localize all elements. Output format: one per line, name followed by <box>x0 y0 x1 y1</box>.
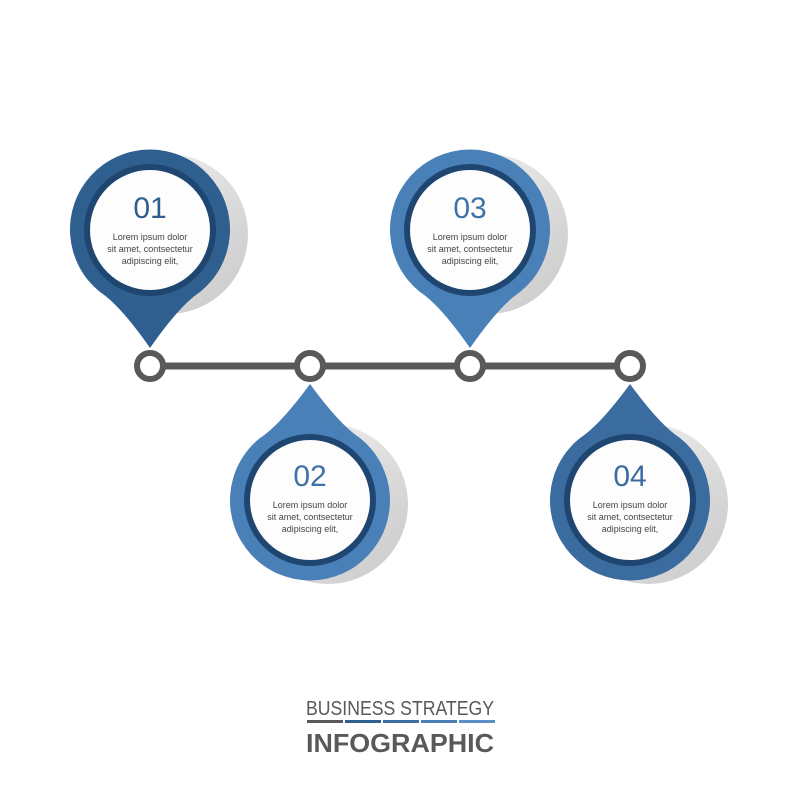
pin 03 <box>390 150 568 348</box>
pin 02: 02 <box>293 460 327 493</box>
pin 01: Lorem ipsum dolor <box>113 232 187 242</box>
pin 04: 04 <box>613 460 647 493</box>
pin 04: Lorem ipsum dolor <box>593 500 667 510</box>
pin 03: adipiscing elit, <box>442 256 498 266</box>
pin 02 <box>230 384 408 584</box>
timeline line <box>137 353 643 379</box>
pin 02: sit amet, contsectetur <box>267 512 353 522</box>
pin 01: 01 <box>133 192 167 225</box>
title block <box>306 698 495 758</box>
pin 02: adipiscing elit, <box>282 524 338 534</box>
pin 01: sit amet, contsectetur <box>107 244 193 254</box>
pin 04 <box>550 384 728 584</box>
title block: INFOGRAPHIC <box>306 728 494 758</box>
pin 04: adipiscing elit, <box>602 524 658 534</box>
pin 03: sit amet, contsectetur <box>427 244 513 254</box>
pin 04: sit amet, contsectetur <box>587 512 673 522</box>
pin 03: 03 <box>453 192 487 225</box>
pin 01: adipiscing elit, <box>122 256 178 266</box>
title block: BUSINESS STRATEGY <box>306 698 494 720</box>
pin 02: Lorem ipsum dolor <box>273 500 347 510</box>
pin 01 <box>70 150 248 348</box>
pin 03: Lorem ipsum dolor <box>433 232 507 242</box>
